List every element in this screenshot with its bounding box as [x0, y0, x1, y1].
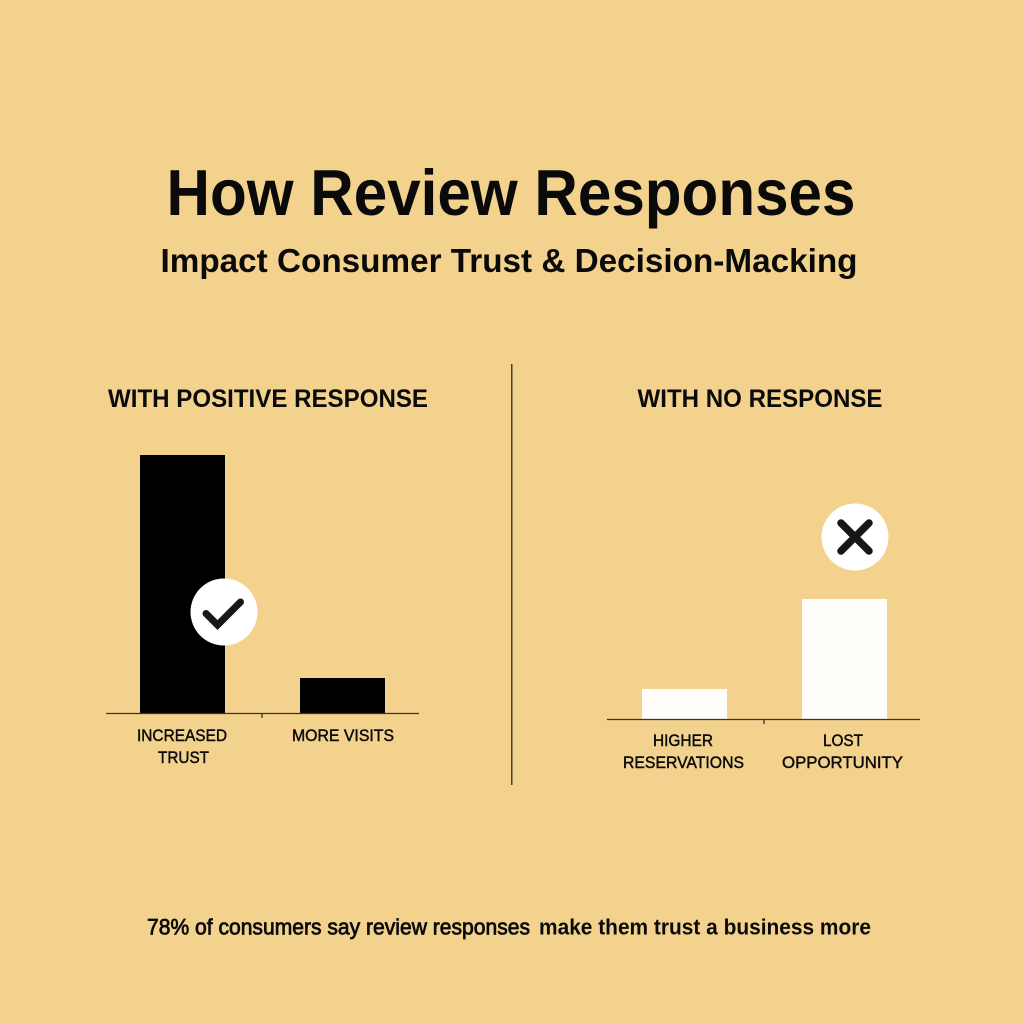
label: increased trust: TRUST — [158, 748, 209, 767]
panel: with no response — [607, 385, 920, 772]
icon: x mark — [822, 504, 888, 570]
footer statistic: make them trust a business more — [539, 914, 871, 940]
label: increased trust: INCREASED — [137, 726, 227, 745]
panel: with positive response — [106, 385, 428, 767]
label: more visits: MORE VISITS — [292, 726, 394, 745]
bar: higher reservations — [642, 689, 727, 719]
panel divider — [511, 364, 512, 785]
bar: increased trust — [140, 455, 225, 713]
label: increased trust — [137, 726, 227, 767]
right axis — [607, 720, 920, 724]
bar: more visits — [300, 678, 385, 713]
footer statistic: 78% of consumers say review responses — [147, 914, 530, 940]
label: lost opportunity — [782, 731, 903, 772]
label: lost opportunity: OPPORTUNITY — [782, 753, 903, 772]
label: higher reservations — [623, 731, 744, 772]
label: higher reservations: RESERVATIONS — [623, 753, 744, 772]
label: lost opportunity: LOST — [823, 731, 863, 750]
label: higher reservations: HIGHER — [653, 731, 713, 750]
icon: check mark — [190, 578, 258, 646]
title: How Review Responses — [166, 156, 856, 229]
footer statistic — [147, 914, 871, 940]
subtitle: Impact Consumer Trust & Decision-Macking — [160, 242, 858, 279]
left panel heading: WITH POSITIVE RESPONSE — [108, 385, 428, 413]
right panel heading: WITH NO RESPONSE — [638, 385, 882, 413]
bar: lost opportunity — [802, 599, 887, 719]
left axis — [106, 714, 419, 718]
